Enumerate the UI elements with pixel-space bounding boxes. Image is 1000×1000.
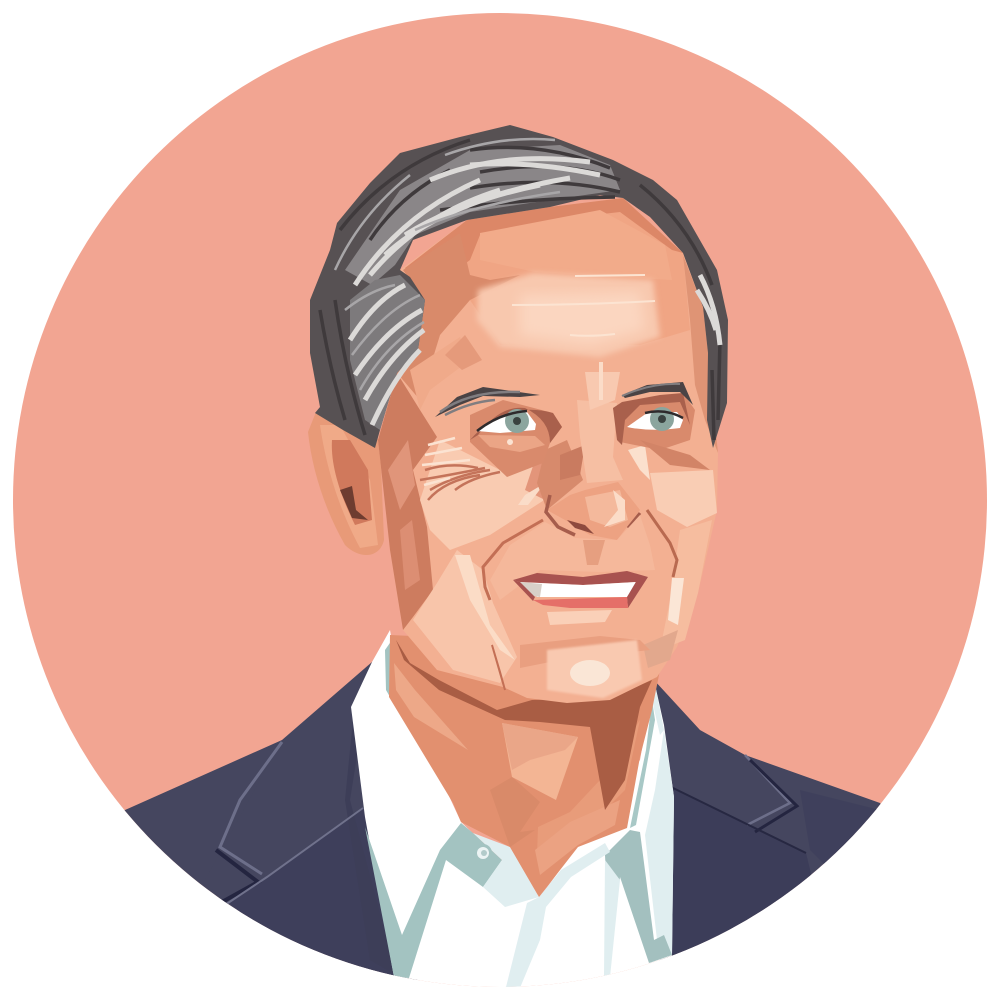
light collar band bbox=[473, 833, 539, 907]
collar button bbox=[485, 844, 492, 850]
teal collar strip by neck bbox=[385, 643, 390, 695]
jacket bbox=[110, 662, 900, 995]
temple plane bbox=[410, 340, 455, 400]
wrinkles beside left eye bbox=[420, 465, 500, 500]
nose side shade bbox=[537, 440, 583, 510]
right temple shade bbox=[683, 255, 718, 453]
neck left plane bbox=[394, 663, 468, 750]
left side shade bbox=[378, 373, 437, 630]
white collar and front bbox=[351, 630, 674, 995]
jaw crease bbox=[492, 645, 505, 690]
upper cheek plane bbox=[420, 440, 552, 550]
forehead highlight bbox=[477, 273, 660, 357]
nasolabial folds bbox=[483, 520, 543, 600]
chin bbox=[547, 640, 642, 698]
neck highlight bbox=[502, 723, 578, 800]
figure bbox=[110, 125, 900, 995]
light strands bbox=[350, 159, 720, 425]
eyes and brows bbox=[435, 382, 710, 477]
left forehead shade bbox=[397, 262, 520, 396]
nose tip bbox=[547, 482, 640, 540]
right cheek bbox=[650, 470, 717, 527]
neck bbox=[389, 635, 660, 897]
right brow bbox=[622, 382, 693, 405]
dark strands bbox=[320, 140, 720, 440]
below mouth plane bbox=[518, 610, 650, 650]
hair mid-grey mass bbox=[345, 145, 620, 285]
light placket strips bbox=[504, 843, 610, 995]
mouth bbox=[513, 571, 648, 608]
left collar teal edge bbox=[365, 823, 502, 978]
left eye socket bbox=[470, 400, 562, 477]
below nose bbox=[490, 515, 655, 600]
chin shadow bbox=[396, 640, 652, 810]
nose bridge highlight bbox=[577, 400, 623, 483]
face base bbox=[400, 231, 718, 703]
right eye socket bbox=[613, 393, 695, 450]
shirt bbox=[351, 630, 674, 995]
right lower jacket bbox=[671, 787, 815, 960]
right eye bbox=[627, 412, 683, 430]
light right collar bbox=[645, 730, 674, 963]
left lapel lower panel bbox=[237, 910, 398, 976]
right collar teal bbox=[605, 830, 672, 963]
forehead creases bbox=[512, 275, 655, 336]
right under-eye bbox=[640, 440, 710, 470]
ear bbox=[308, 412, 384, 555]
left eye bbox=[477, 412, 536, 433]
left brow bbox=[435, 387, 540, 417]
hair bbox=[310, 125, 728, 448]
neck right plane bbox=[537, 720, 640, 855]
hairline shade bbox=[405, 198, 682, 268]
nostril and nose outline bbox=[546, 495, 575, 535]
face bbox=[378, 198, 718, 703]
lower left cheek bbox=[413, 550, 517, 683]
forehead top plane bbox=[467, 212, 690, 345]
